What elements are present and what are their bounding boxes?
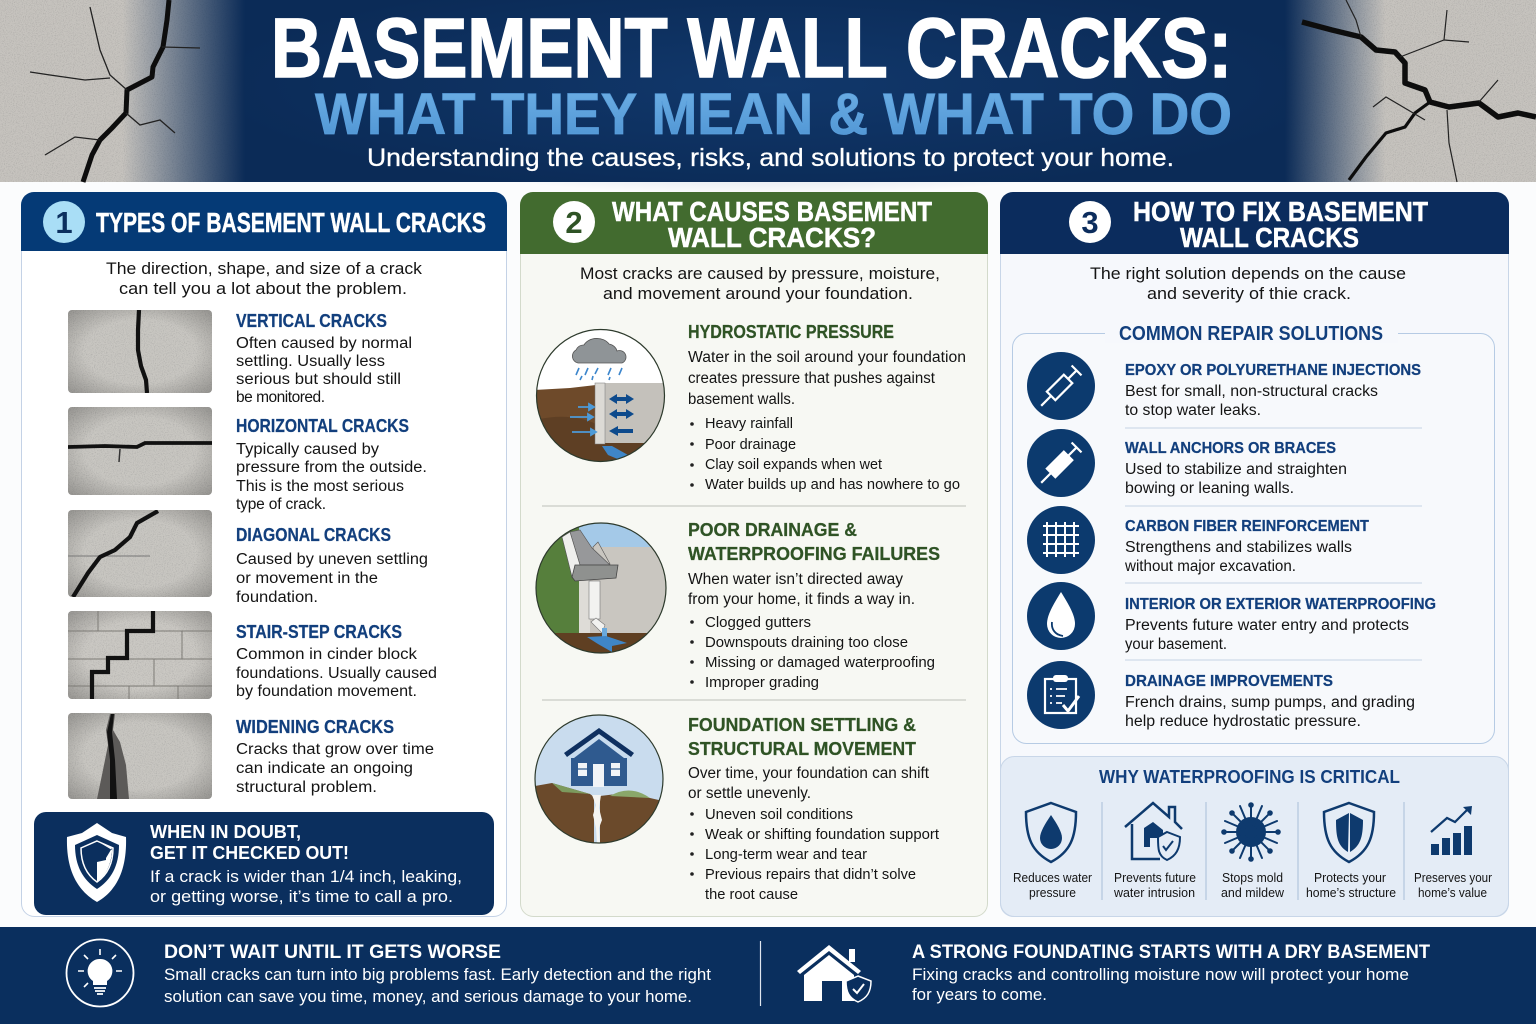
horizontal crack photo — [68, 407, 212, 495]
stair-step crack photo — [68, 611, 212, 699]
poor drainage text: POOR DRAINAGE & — [688, 520, 857, 540]
carbon fiber text: without major excavation. — [1124, 558, 1296, 575]
icon: house with shield — [797, 945, 871, 1002]
callout: when in doubt: or getting worse, it’s time to call a pro. — [150, 887, 453, 906]
stair-step cracks text — [236, 622, 437, 700]
poor drainage text — [688, 520, 940, 691]
panel 1 header — [21, 192, 507, 251]
epoxy text — [1125, 362, 1421, 419]
panel 3 header — [1000, 192, 1509, 254]
panel: how to fix basement wall cracks — [1000, 192, 1509, 916]
why waterproofing is critical box — [1000, 756, 1508, 916]
wall anchors text — [1125, 440, 1347, 497]
vertical cracks text: settling. Usually less — [236, 353, 385, 370]
horizontal cracks text: pressure from the outside. — [236, 459, 427, 476]
hydrostatic pressure text: Water builds up and has nowhere to go — [705, 477, 960, 493]
callout: when in doubt: GET IT CHECKED OUT! — [150, 842, 349, 863]
footer banner — [0, 927, 1536, 1024]
panel 3 intro: and severity of thie crack. — [1147, 284, 1351, 303]
hydrostatic pressure text: basement walls. — [688, 391, 795, 408]
benefit: protects your home's structure: home’s structure — [1306, 886, 1396, 900]
hydrostatic pressure text: Clay soil expands when wet — [705, 457, 882, 473]
widening cracks text: can indicate an ongoing — [236, 760, 413, 777]
epoxy text: to stop water leaks. — [1125, 402, 1261, 419]
foundation settling text: Previous repairs that didn’t solve — [705, 867, 916, 883]
panel 2 header: 2 — [565, 205, 583, 240]
stair-step cracks text: STAIR-STEP CRACKS — [236, 622, 402, 642]
foundation settling text: Uneven soil conditions — [705, 807, 853, 823]
widening cracks text: structural problem. — [236, 779, 377, 796]
panel 1 header: 1 — [55, 205, 73, 240]
benefit: preserves your home's value: home’s value — [1418, 886, 1487, 900]
panel 1 intro: can tell you a lot about the problem. — [119, 279, 407, 298]
panel 2 header: WALL CRACKS? — [668, 222, 876, 253]
don't wait text: DON’T WAIT UNTIL IT GETS WORSE — [164, 941, 501, 963]
subtitle: WHAT THEY MEAN & WHAT TO DO — [315, 82, 1232, 147]
benefit: protects your home's structure — [1306, 803, 1396, 900]
hydrostatic pressure text — [688, 322, 966, 493]
drainage text: French drains, sump pumps, and grading — [1125, 694, 1415, 711]
header banner — [0, 0, 1536, 195]
benefit: reduces water pressure: pressure — [1029, 886, 1076, 900]
benefit: prevents future water intrusion: water intrusion — [1113, 886, 1195, 900]
diagonal cracks text: foundation. — [236, 589, 318, 606]
waterproofing text: INTERIOR OR EXTERIOR WATERPROOFING — [1125, 596, 1436, 613]
poor drainage text: WATERPROOFING FAILURES — [688, 544, 940, 564]
common repair solutions box — [1012, 323, 1494, 744]
panel 3 intro: The right solution depends on the cause — [1090, 264, 1406, 283]
rain cloud — [572, 338, 626, 363]
horizontal cracks text: type of crack. — [236, 496, 326, 513]
foundation settling text: the root cause — [705, 887, 798, 903]
benefit: preserves your home's value: Preserves your — [1414, 871, 1492, 885]
benefit: reduces water pressure — [1013, 803, 1092, 900]
icon: syringe — [1027, 352, 1095, 420]
hydrostatic pressure text: HYDROSTATIC PRESSURE — [688, 322, 894, 342]
benefit: stops mold and mildew — [1221, 802, 1285, 900]
benefit: preserves your home's value — [1414, 806, 1492, 900]
horizontal cracks text: HORIZONTAL CRACKS — [236, 416, 409, 436]
foundation settling text: Over time, your foundation can shift — [688, 765, 930, 782]
drainage text: DRAINAGE IMPROVEMENTS — [1125, 673, 1333, 690]
horizontal cracks text: This is the most serious — [236, 478, 404, 495]
carbon fiber text: CARBON FIBER REINFORCEMENT — [1125, 518, 1369, 535]
panel 2 header: WHAT CAUSES BASEMENT — [612, 196, 932, 227]
stair-step cracks text: foundations. Usually caused — [236, 665, 437, 682]
horizontal cracks text: Typically caused by — [236, 441, 379, 458]
don't wait text: Small cracks can turn into big problems fast. Early detection and the right — [164, 966, 711, 984]
icon: light bulb — [66, 940, 134, 1006]
diagonal cracks text: Caused by uneven settling — [236, 551, 428, 568]
diagonal crack photo — [68, 510, 212, 597]
benefit: prevents future water intrusion — [1113, 803, 1196, 900]
waterproofing text: Prevents future water entry and protects — [1125, 617, 1409, 634]
foundation settling text: or settle unevenly. — [688, 785, 811, 802]
drainage text: help reduce hydrostatic pressure. — [1125, 713, 1361, 730]
icon: water drop — [1027, 582, 1095, 650]
vertical cracks text: serious but should still — [236, 371, 401, 388]
diagonal cracks text — [236, 525, 428, 606]
title: BASEMENT WALL CRACKS: — [271, 1, 1232, 95]
hydrostatic pressure text: Water in the soil around your foundation — [688, 349, 966, 366]
drainage text — [1125, 673, 1415, 730]
strong foundation text: Fixing cracks and controlling moisture now will protect your home — [912, 966, 1409, 984]
poor drainage text: Missing or damaged waterproofing — [705, 655, 935, 671]
illustration: foundation settling — [535, 715, 663, 845]
poor drainage text: from your home, it finds a way in. — [688, 591, 915, 608]
vertical cracks text: Often caused by normal — [236, 335, 412, 352]
icon: carbon fiber mesh — [1027, 506, 1095, 574]
strong foundation text: for years to come. — [912, 986, 1047, 1004]
poor drainage text: Clogged gutters — [705, 615, 811, 631]
wall anchors text: bowing or leaning walls. — [1125, 480, 1294, 497]
vertical cracks text: VERTICAL CRACKS — [236, 311, 387, 331]
poor drainage text: Improper grading — [705, 675, 819, 691]
widening cracks text: WIDENING CRACKS — [236, 717, 394, 737]
foundation settling text: Weak or shifting foundation support — [705, 827, 939, 843]
widening crack photo — [68, 713, 212, 799]
waterproofing text — [1125, 596, 1436, 653]
benefit: prevents future water intrusion: Prevents future — [1114, 871, 1196, 885]
panel 2 intro: and movement around your foundation. — [603, 284, 913, 303]
vertical cracks text — [236, 311, 412, 406]
epoxy text: EPOXY OR POLYURETHANE INJECTIONS — [1125, 362, 1421, 379]
horizontal cracks text — [236, 416, 427, 513]
diagonal cracks text: DIAGONAL CRACKS — [236, 525, 391, 545]
diagonal cracks text: or movement in the — [236, 570, 378, 587]
wall anchors text: WALL ANCHORS OR BRACES — [1125, 440, 1336, 457]
strong foundation text — [912, 941, 1430, 1004]
benefit: stops mold and mildew: Stops mold — [1222, 871, 1283, 885]
hydrostatic pressure text: creates pressure that pushes against — [688, 370, 936, 387]
poor drainage text: When water isn’t directed away — [688, 571, 903, 588]
stair-step cracks text: Common in cinder block — [236, 646, 417, 663]
strong foundation text: A STRONG FOUNDATING STARTS WITH A DRY BASEMENT — [912, 941, 1430, 963]
widening cracks text — [236, 717, 434, 796]
carbon fiber text: Strengthens and stabilizes walls — [1125, 539, 1352, 556]
waterproofing text: your basement. — [1125, 636, 1227, 653]
right concrete wall with crack — [1285, 0, 1536, 182]
why heading: WHY WATERPROOFING IS CRITICAL — [1099, 767, 1400, 787]
callout: when in doubt: WHEN IN DOUBT, — [150, 821, 301, 842]
benefit: reduces water pressure: Reduces water — [1013, 871, 1092, 885]
icon: shield — [67, 823, 126, 902]
stair-step cracks text: by foundation movement. — [236, 683, 417, 700]
poor drainage text: Downspouts draining too close — [705, 635, 908, 651]
don't wait text: solution can save you time, money, and serious damage to your home. — [164, 988, 692, 1006]
panel: what causes basement wall cracks — [520, 192, 988, 916]
house — [571, 758, 627, 786]
panel: types of basement wall cracks — [21, 192, 507, 916]
panel 3 header: HOW TO FIX BASEMENT — [1133, 196, 1428, 227]
panel 3 header: WALL CRACKS — [1180, 222, 1359, 253]
foundation settling text — [688, 715, 939, 903]
benefit: stops mold and mildew: and mildew — [1221, 886, 1285, 900]
left concrete wall with crack — [0, 0, 245, 182]
illustration: poor drainage — [535, 522, 667, 658]
vertical crack photo — [68, 310, 212, 393]
callout: when in doubt: If a crack is wider than 1/4 inch, leaking, — [150, 867, 462, 886]
vertical cracks text: be monitored. — [236, 389, 325, 406]
repair solutions heading: COMMON REPAIR SOLUTIONS — [1119, 323, 1383, 345]
panel 2 intro — [580, 264, 940, 303]
foundation settling text: STRUCTURAL MOVEMENT — [688, 739, 916, 759]
panel 3 intro — [1090, 264, 1406, 303]
widening cracks text: Cracks that grow over time — [236, 741, 434, 758]
foundation settling text: Long-term wear and tear — [705, 847, 867, 863]
hydrostatic pressure text: Poor drainage — [705, 437, 796, 453]
icon: clipboard checklist — [1027, 661, 1095, 729]
panel 3 header: 3 — [1081, 205, 1099, 240]
panel 2 header — [520, 192, 988, 254]
wall anchors text: Used to stabilize and straighten — [1125, 461, 1347, 478]
illustration: hydrostatic pressure — [535, 328, 668, 465]
panel 1 header: TYPES OF BASEMENT WALL CRACKS — [96, 207, 486, 238]
panel 1 intro: The direction, shape, and size of a crack — [106, 259, 423, 278]
epoxy text: Best for small, non-structural cracks — [1125, 383, 1378, 400]
panel 2 intro: Most cracks are caused by pressure, moisture, — [580, 264, 940, 283]
don't wait text — [164, 941, 711, 1006]
panel 1 intro — [106, 259, 423, 298]
tagline: Understanding the causes, risks, and solutions to protect your home. — [367, 144, 1174, 172]
foundation settling text: FOUNDATION SETTLING & — [688, 715, 916, 735]
callout: when in doubt — [34, 812, 494, 915]
hydrostatic pressure text: Heavy rainfall — [705, 416, 793, 432]
benefit: protects your home's structure: Protects your — [1314, 871, 1386, 885]
carbon fiber text — [1124, 518, 1369, 575]
icon: syringe filled — [1027, 429, 1095, 497]
